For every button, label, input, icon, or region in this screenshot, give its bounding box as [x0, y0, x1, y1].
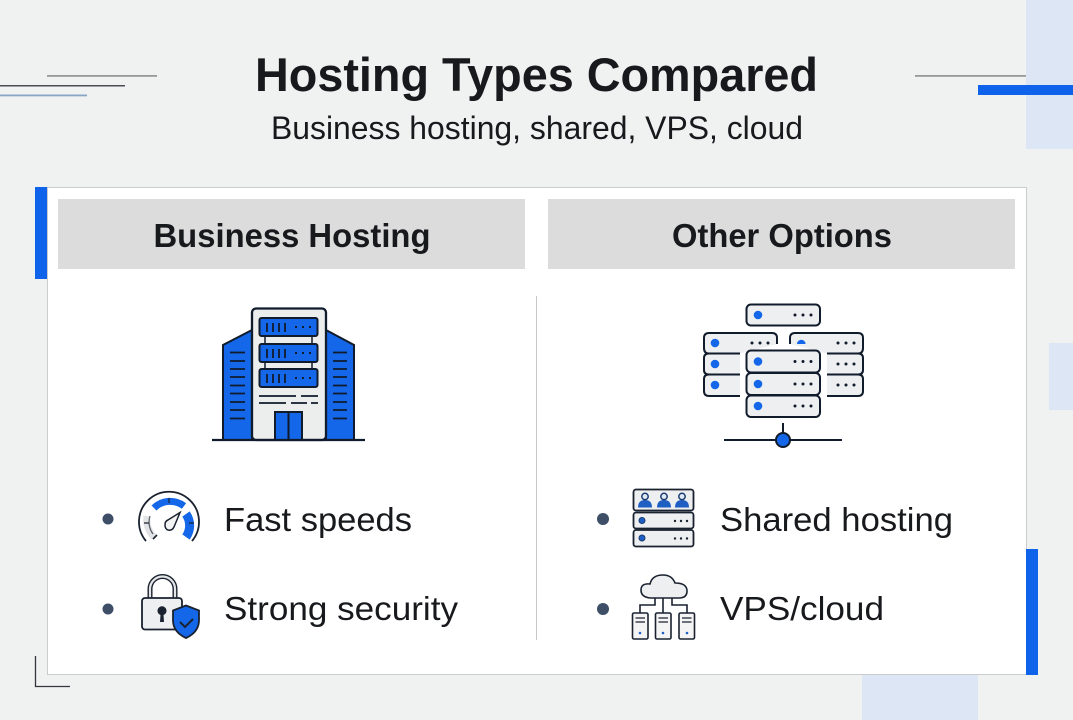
- label: Strong security: [224, 590, 459, 627]
- panel header: Other Options: Other Options: [672, 217, 892, 254]
- bullet: [102, 604, 114, 614]
- icon: shared server: [634, 490, 694, 546]
- panel header: Other Options: [548, 199, 1015, 269]
- icon: speedometer: [139, 492, 199, 541]
- bullet: [102, 514, 114, 524]
- list item: VPS/cloud: [597, 575, 884, 639]
- icon: cloud with servers: [632, 575, 694, 639]
- bullet: [597, 603, 609, 615]
- panel header: Business Hosting: Business Hosting: [154, 217, 430, 254]
- top-right accent lines: [915, 75, 1073, 95]
- main card: [35, 187, 1038, 675]
- decorative pale blue blocks: [862, 0, 1073, 720]
- label: Shared hosting: [720, 501, 953, 538]
- top-left accent lines: [0, 75, 157, 96]
- list item: Strong security: [102, 576, 459, 638]
- bullet: [597, 513, 609, 525]
- title: Hosting Types Compared: [255, 48, 818, 101]
- subtitle: Business hosting, shared, VPS, cloud: [271, 110, 803, 146]
- list item: Shared hosting: [597, 490, 953, 546]
- icon: server cluster: [704, 304, 863, 447]
- panel header: Business Hosting: [58, 199, 525, 269]
- accent bar: left: [35, 187, 47, 279]
- column divider: [536, 296, 537, 640]
- bottom-left corner bracket: [36, 656, 70, 686]
- accent bar: right: [1026, 549, 1038, 675]
- icon: office building with servers: [212, 308, 365, 440]
- label: VPS/cloud: [720, 590, 884, 627]
- icon: padlock with shield: [142, 576, 199, 638]
- list item: Fast speeds: [102, 492, 412, 541]
- label: Fast speeds: [224, 501, 412, 538]
